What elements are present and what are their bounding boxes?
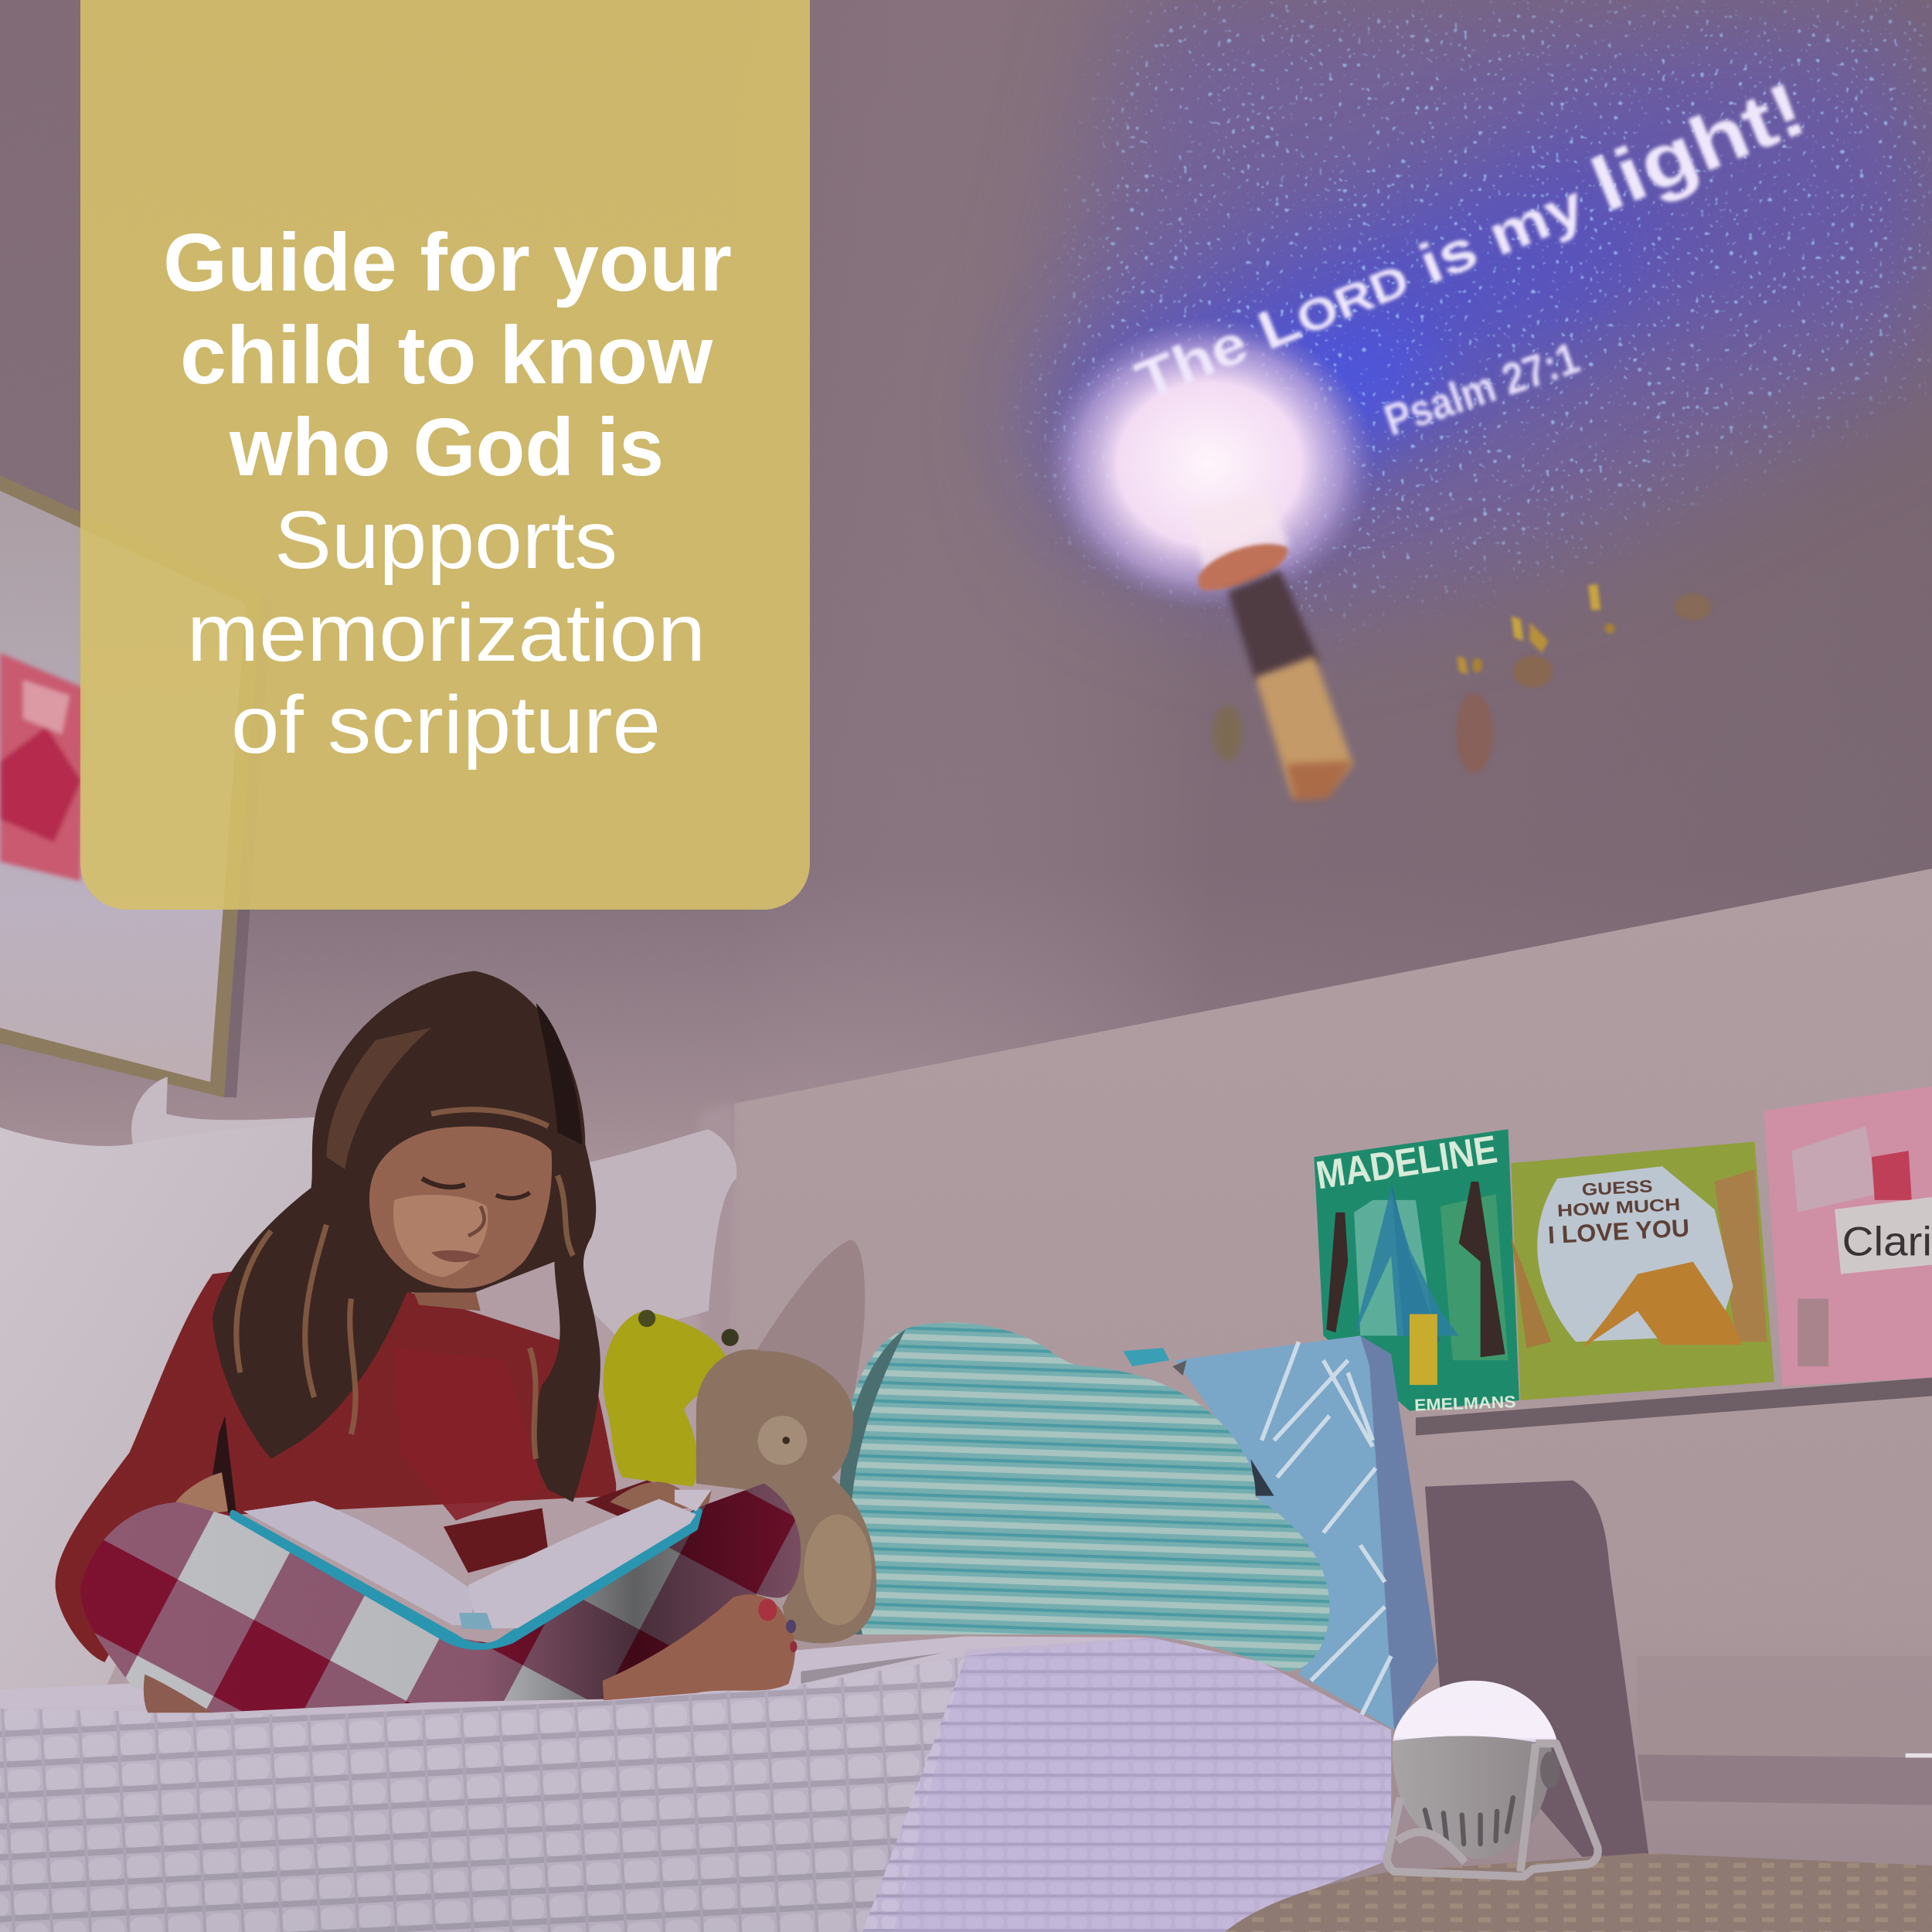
book: Clarice <box>1764 1086 1932 1386</box>
bedroom right side scene <box>750 1086 1932 1857</box>
title: GUESS HOW MUCH I LOVE YOU <box>1547 1176 1690 1249</box>
book: Madeline <box>1313 1127 1519 1415</box>
yellow text panel <box>80 0 810 910</box>
right pillow <box>554 1129 736 1335</box>
title: Clarice: Clari <box>1842 1219 1932 1265</box>
open book <box>233 1490 712 1647</box>
projector glow dome <box>1393 1681 1559 1747</box>
right wall <box>734 869 1932 1932</box>
lower wall band <box>1638 1656 1932 1760</box>
projector vents <box>1425 1798 1513 1844</box>
ceiling shading on right <box>734 0 1932 1105</box>
light on lower band <box>1906 1753 1932 1757</box>
heading: who God is <box>229 402 664 493</box>
sweater <box>56 1262 678 1662</box>
subheading: Supports <box>274 495 617 586</box>
large left pillow <box>0 1120 345 1690</box>
face <box>369 1127 552 1288</box>
left foot <box>144 1675 213 1713</box>
city lights <box>1456 584 1712 773</box>
acrylic book shelf <box>1416 1378 1932 1435</box>
pillow corner behind <box>131 1077 321 1169</box>
title: GUESS HOW MUCH I LOVE YOU: HOW MUCH <box>1556 1195 1681 1220</box>
heading: child to know <box>180 310 713 401</box>
tassel on cushion <box>1123 1348 1169 1366</box>
subheading: memorization <box>187 587 706 679</box>
teddy bear <box>696 1349 876 1643</box>
lighthouse <box>1191 493 1353 801</box>
shadow on wall behind projector <box>1425 1481 1648 1857</box>
yellow plush toy <box>604 1310 739 1487</box>
title: GUESS HOW MUCH I LOVE YOU: GUESS <box>1581 1176 1653 1199</box>
knitted cloud cushion <box>838 1322 1329 1672</box>
projected verse: The LORD is my light!: The LORD is my light! <box>1120 66 1817 416</box>
neck <box>406 1274 481 1311</box>
hair <box>213 971 600 1502</box>
projection on the ceiling <box>889 0 1932 801</box>
back pillows <box>0 1077 876 1715</box>
Star projector device <box>1225 1681 1932 1932</box>
projector stand <box>1387 1743 1598 1876</box>
right hand <box>610 1482 712 1515</box>
framed picture on the left wall <box>0 475 272 1097</box>
lighthouse glow <box>1043 317 1376 611</box>
left hand <box>175 1472 228 1515</box>
bed surface near projector <box>1225 1853 1932 1932</box>
bed surface behind girl <box>0 1688 135 1715</box>
wall shadow of toy <box>750 1240 865 1471</box>
heading: Guide for your <box>163 217 732 308</box>
star specks <box>1001 0 1932 641</box>
subheading <box>187 495 706 770</box>
bed with knitted blanket <box>0 1636 1391 1932</box>
plaid pyjama trousers <box>80 1484 801 1713</box>
heading <box>163 217 732 493</box>
title: GUESS HOW MUCH I LOVE YOU: I LOVE YOU <box>1547 1214 1690 1249</box>
blue herringbone cushion <box>1175 1335 1437 1730</box>
projector bowl <box>1393 1736 1552 1859</box>
painting in frame <box>0 653 83 881</box>
right foot with painted toes <box>603 1594 798 1700</box>
projected reference: Psalm 27:1: Psalm 27:1 <box>1378 333 1586 446</box>
author: BEMELMANS: EMELMANS <box>1414 1393 1516 1415</box>
child reading <box>56 971 825 1730</box>
left corner wall shadow <box>699 1104 734 1391</box>
subheading: of scripture <box>231 679 661 770</box>
projector knob <box>1540 1751 1560 1788</box>
book: Guess How Much I Love You <box>1512 1141 1774 1400</box>
title: MADELINE: MADELINE <box>1313 1127 1500 1197</box>
